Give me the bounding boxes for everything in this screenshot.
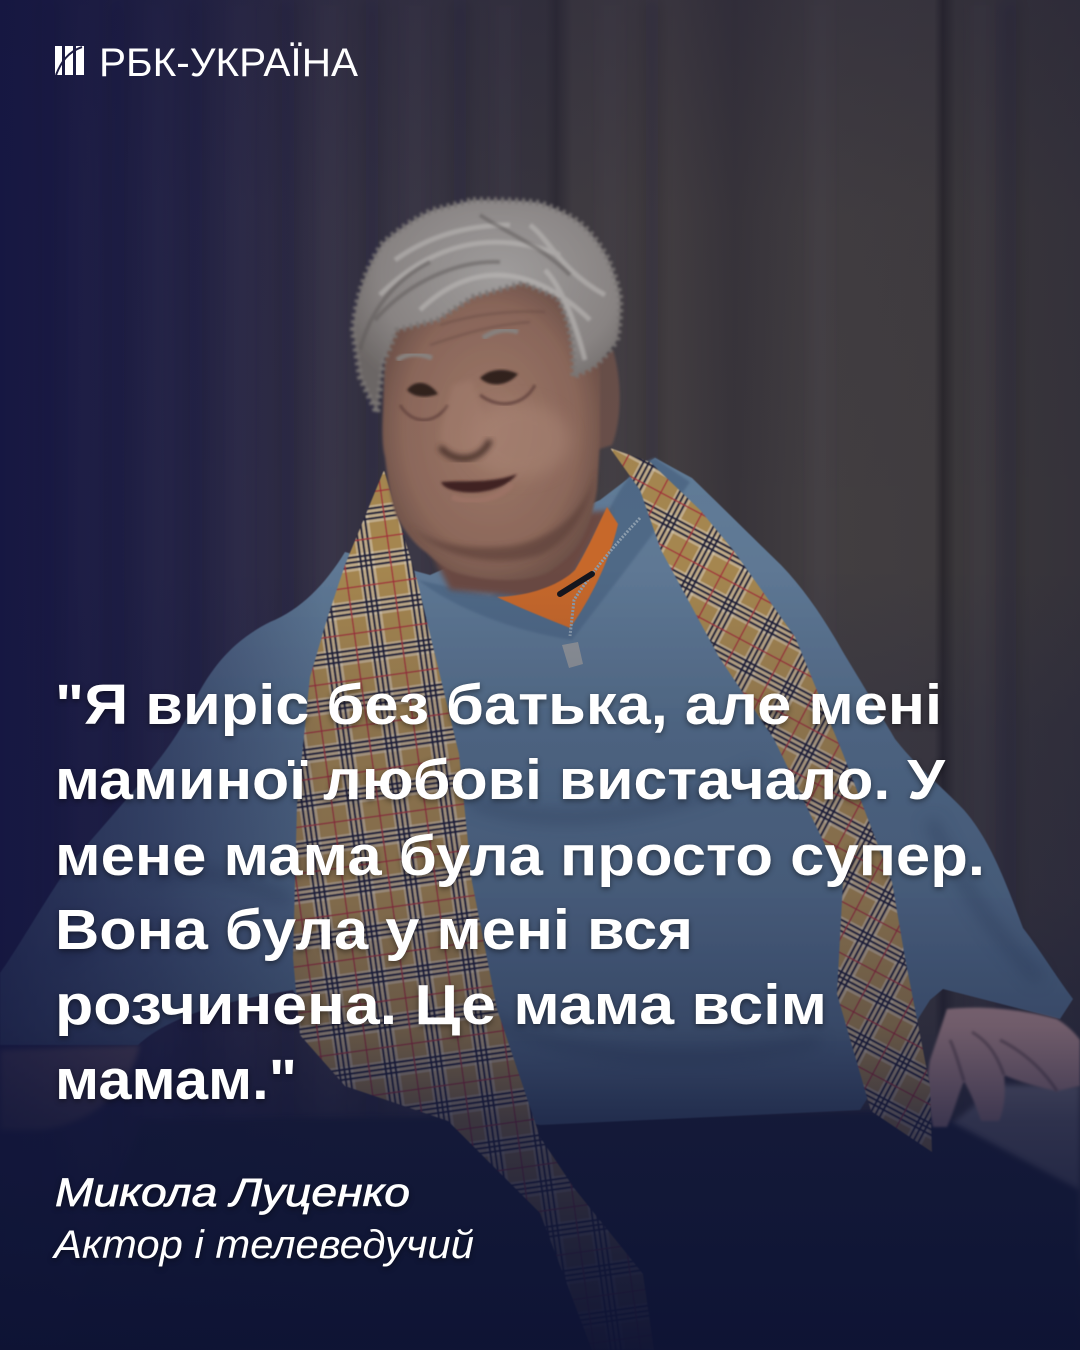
cheek highlight [470, 402, 570, 478]
jowl shadow [410, 470, 596, 561]
sweater collar [418, 458, 690, 640]
quote text: Вона була у мені вся [55, 898, 693, 962]
face [382, 275, 600, 580]
finger shadows [950, 1032, 1057, 1091]
quote text: мамам." [55, 1048, 297, 1112]
right hand [928, 1008, 1080, 1127]
scarf left band [293, 470, 654, 1350]
trousers [60, 1110, 1080, 1350]
microphone [560, 574, 592, 594]
forehead wrinkles [430, 312, 545, 345]
hair dark strands [360, 215, 570, 350]
left eyebrow [397, 354, 432, 360]
logo wordmark: РБК-УКРАЇНА [99, 41, 359, 85]
attribution [52, 1171, 474, 1267]
nose [440, 380, 490, 456]
speaker role: Актор і телеведучий [52, 1223, 474, 1267]
left eye bag [400, 405, 448, 420]
speaker name: Микола Луценко [55, 1171, 410, 1215]
lower lip [452, 484, 512, 501]
mouth [441, 474, 517, 492]
left eye [407, 383, 438, 397]
sweater [0, 458, 1073, 1125]
quote text: розчинена. Це мама всім [55, 973, 827, 1037]
hair strands [380, 225, 605, 360]
zipper [570, 518, 640, 636]
right eye [480, 370, 518, 384]
ear [590, 350, 620, 450]
neck [420, 510, 610, 600]
orange shirt [497, 507, 618, 628]
zipper pull [562, 642, 583, 668]
right eye bag [480, 385, 535, 404]
right eyebrow [483, 330, 518, 338]
quote text: мене мама була просто супер. [55, 824, 985, 888]
quote text [55, 673, 985, 1112]
quote text: "Я виріс без батька, але мені [55, 673, 942, 737]
hair [353, 200, 620, 413]
logo: РБК-Україна [55, 41, 359, 85]
scarf right band [610, 448, 932, 1152]
icon: RBC mark [55, 46, 84, 75]
sweater folds [60, 770, 1040, 1057]
quote text: маминої любові вистачало. У [55, 748, 946, 812]
left hand [0, 1045, 140, 1130]
armchair [950, 1085, 1080, 1260]
nose shadow [440, 440, 490, 459]
